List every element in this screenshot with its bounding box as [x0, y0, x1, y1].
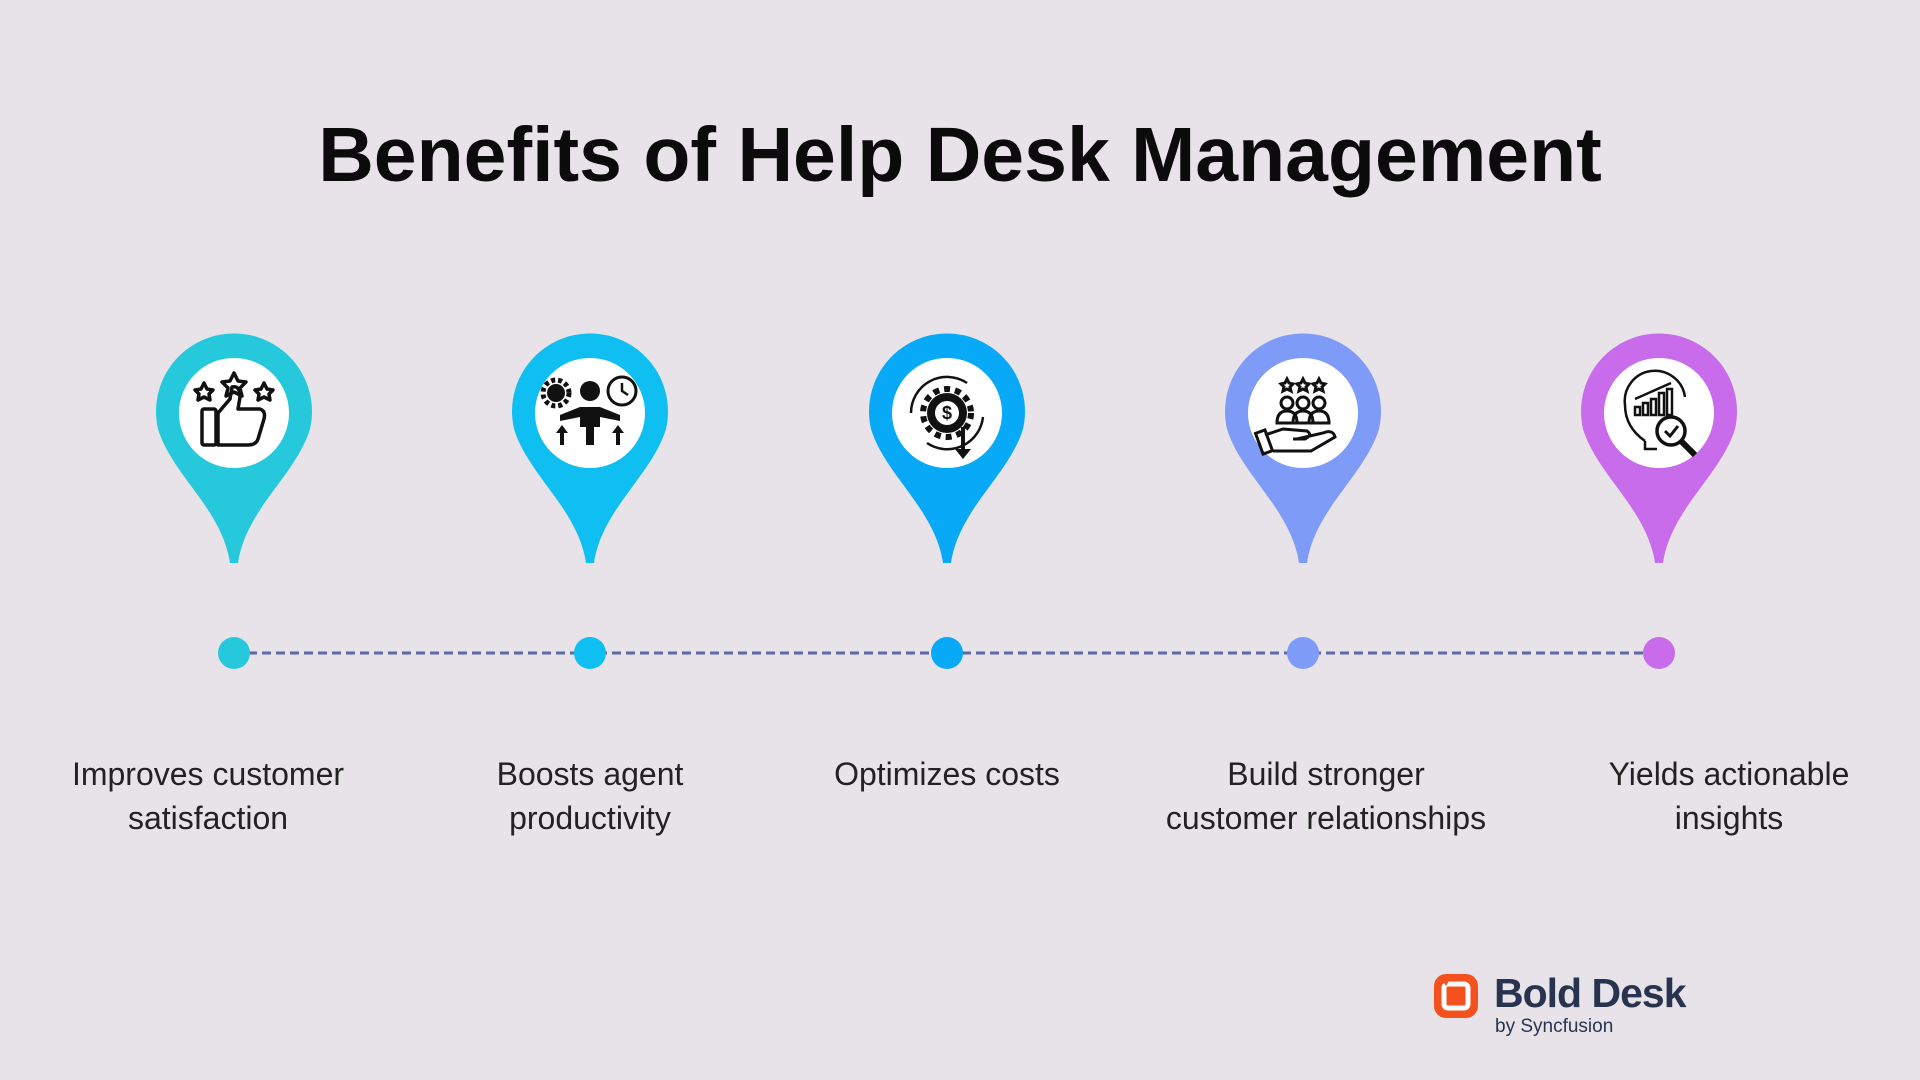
- label 5: Yields actionable insights: [1609, 756, 1849, 836]
- logo: [1434, 970, 1686, 1037]
- icon: cost gear: [927, 393, 967, 433]
- label 2: Boosts agent productivity: [497, 756, 683, 836]
- pin 1: [156, 333, 312, 563]
- icon: logo mark: [1434, 974, 1478, 1018]
- pin 4: [1225, 333, 1381, 563]
- label 3: Optimizes costs: [834, 756, 1060, 792]
- dot 3: [931, 637, 963, 669]
- dot 5: [1643, 637, 1675, 669]
- pin 5: [1581, 333, 1737, 563]
- title: Benefits of Help Desk Management: [318, 112, 1602, 198]
- tagline: by Syncfusion: [1495, 1016, 1613, 1037]
- dashed line: [234, 652, 1659, 654]
- label 4: Build stronger: [1227, 756, 1425, 792]
- pin 2: [512, 333, 668, 563]
- dot 1: [218, 637, 250, 669]
- label 4: customer relationships: [1166, 800, 1486, 836]
- icon: bulb with chart and magnifier: [1625, 371, 1695, 455]
- icon: agent productivity: [543, 380, 624, 445]
- icon: hand with people: [1256, 379, 1335, 454]
- label 4: [1166, 756, 1486, 836]
- pin 3: [869, 333, 1025, 563]
- brand text: Bold Desk: [1494, 970, 1686, 1016]
- label 1: Improves customer satisfaction: [72, 756, 344, 836]
- pin 3: $: [942, 403, 952, 423]
- icon: thumbs up with stars: [195, 373, 273, 445]
- dot 4: [1287, 637, 1319, 669]
- dot 2: [574, 637, 606, 669]
